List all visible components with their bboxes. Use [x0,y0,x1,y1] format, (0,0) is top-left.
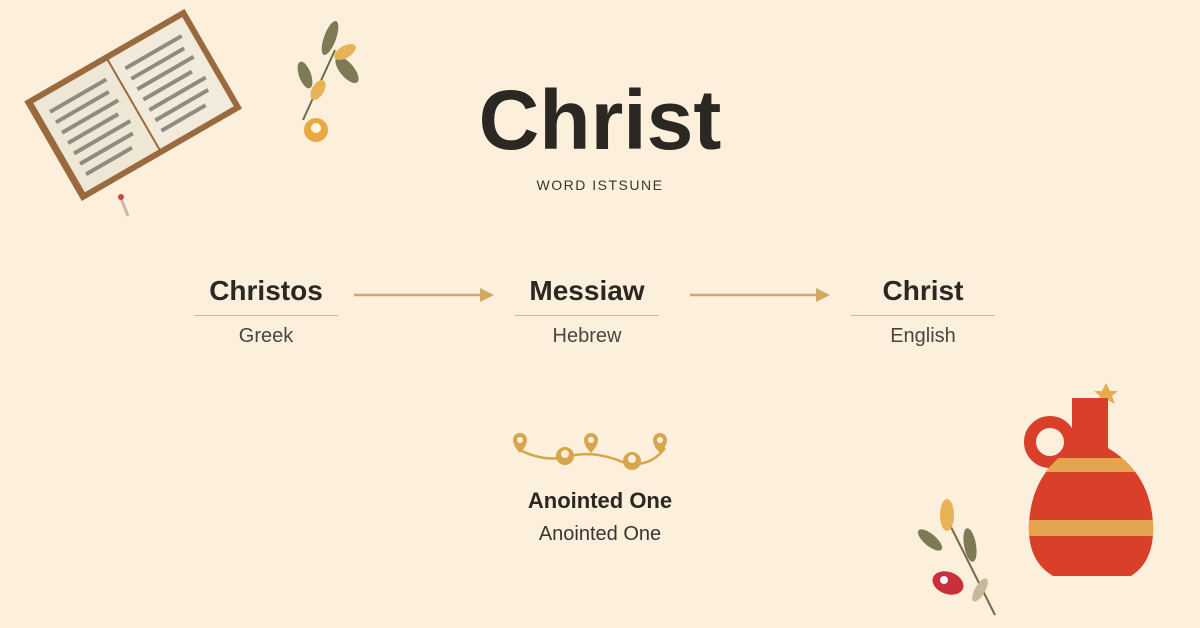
word: Messiaw: Hebrew [553,325,621,347]
icon: open book [24,8,242,216]
word: Christ: Christ [883,275,963,306]
icon: oil jug [1024,383,1154,576]
word: Christos: Christos [209,275,323,306]
title: Christ [479,73,721,167]
icon: map pins path [513,433,667,470]
word: Christos [194,275,338,347]
arrow 2 [690,288,830,302]
icon: olive branch with berry [918,499,996,616]
word: Christ [851,275,995,347]
subtitle: WORD ISTSUNE [537,177,663,193]
icon: olive branch and candle [298,21,359,142]
word: Messiaw: Messiaw [529,275,645,306]
subtext: Anointed One: Anointed One [539,523,661,545]
heading: Anointed One: Anointed One [528,488,672,513]
word: Messiaw [515,275,659,347]
word: Christos: Greek [239,325,293,347]
word: Christ: English [890,325,956,347]
arrow 1 [354,288,494,302]
